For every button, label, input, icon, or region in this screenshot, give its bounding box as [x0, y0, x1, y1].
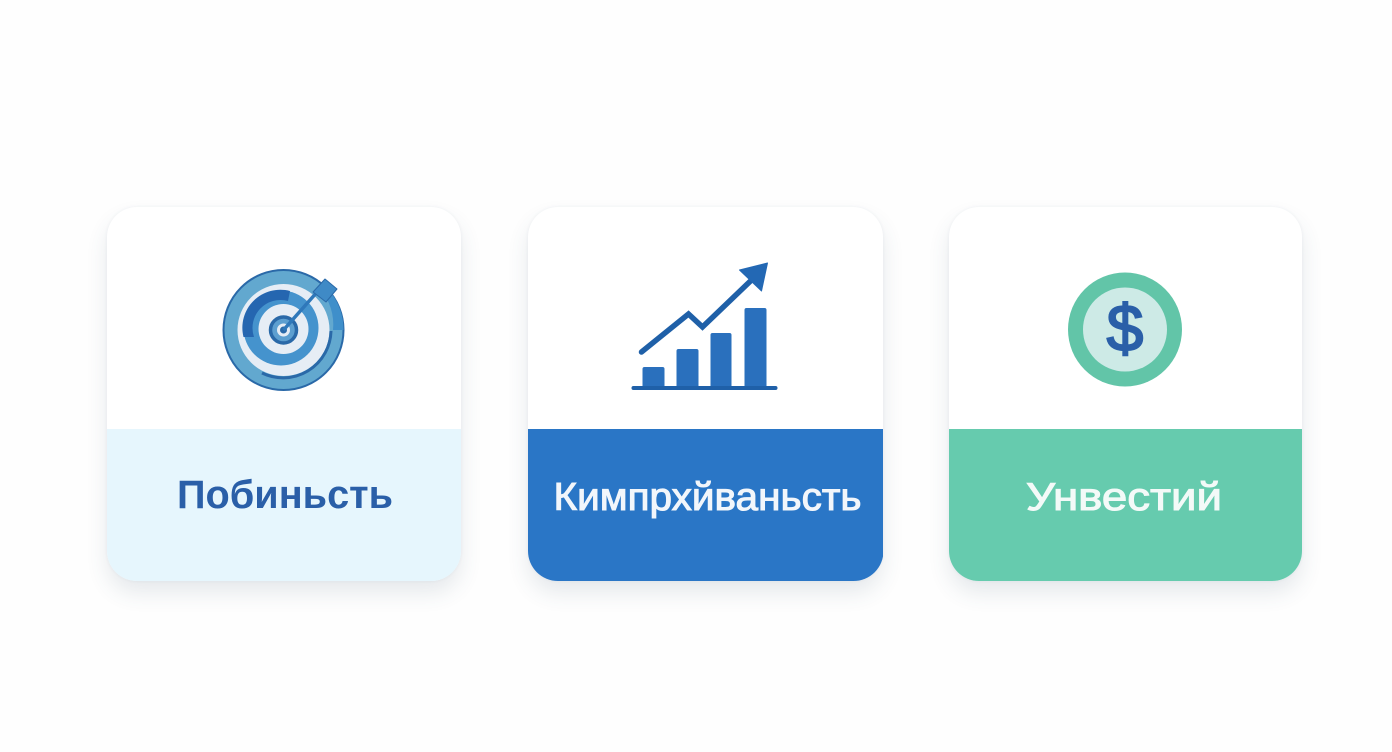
- icon: dollar coin: [1068, 272, 1182, 386]
- panel: card 2: [528, 207, 883, 581]
- label band: card 1: [107, 429, 461, 581]
- icon: target with dart: [224, 270, 344, 390]
- label band: card 3: [949, 429, 1302, 581]
- label band: card 2: [528, 429, 883, 581]
- label: card 3: Унвестий: [1026, 476, 1222, 519]
- panel: card 1: [107, 207, 461, 581]
- panel: card 3: [949, 207, 1302, 581]
- icon: rising bar chart with arrow: [633, 263, 775, 388]
- icon: dollar coin: $: [1107, 291, 1143, 365]
- label: card 1: Побиньсть: [177, 473, 393, 517]
- label: card 2: Кимпрхйваньсть: [553, 476, 861, 519]
